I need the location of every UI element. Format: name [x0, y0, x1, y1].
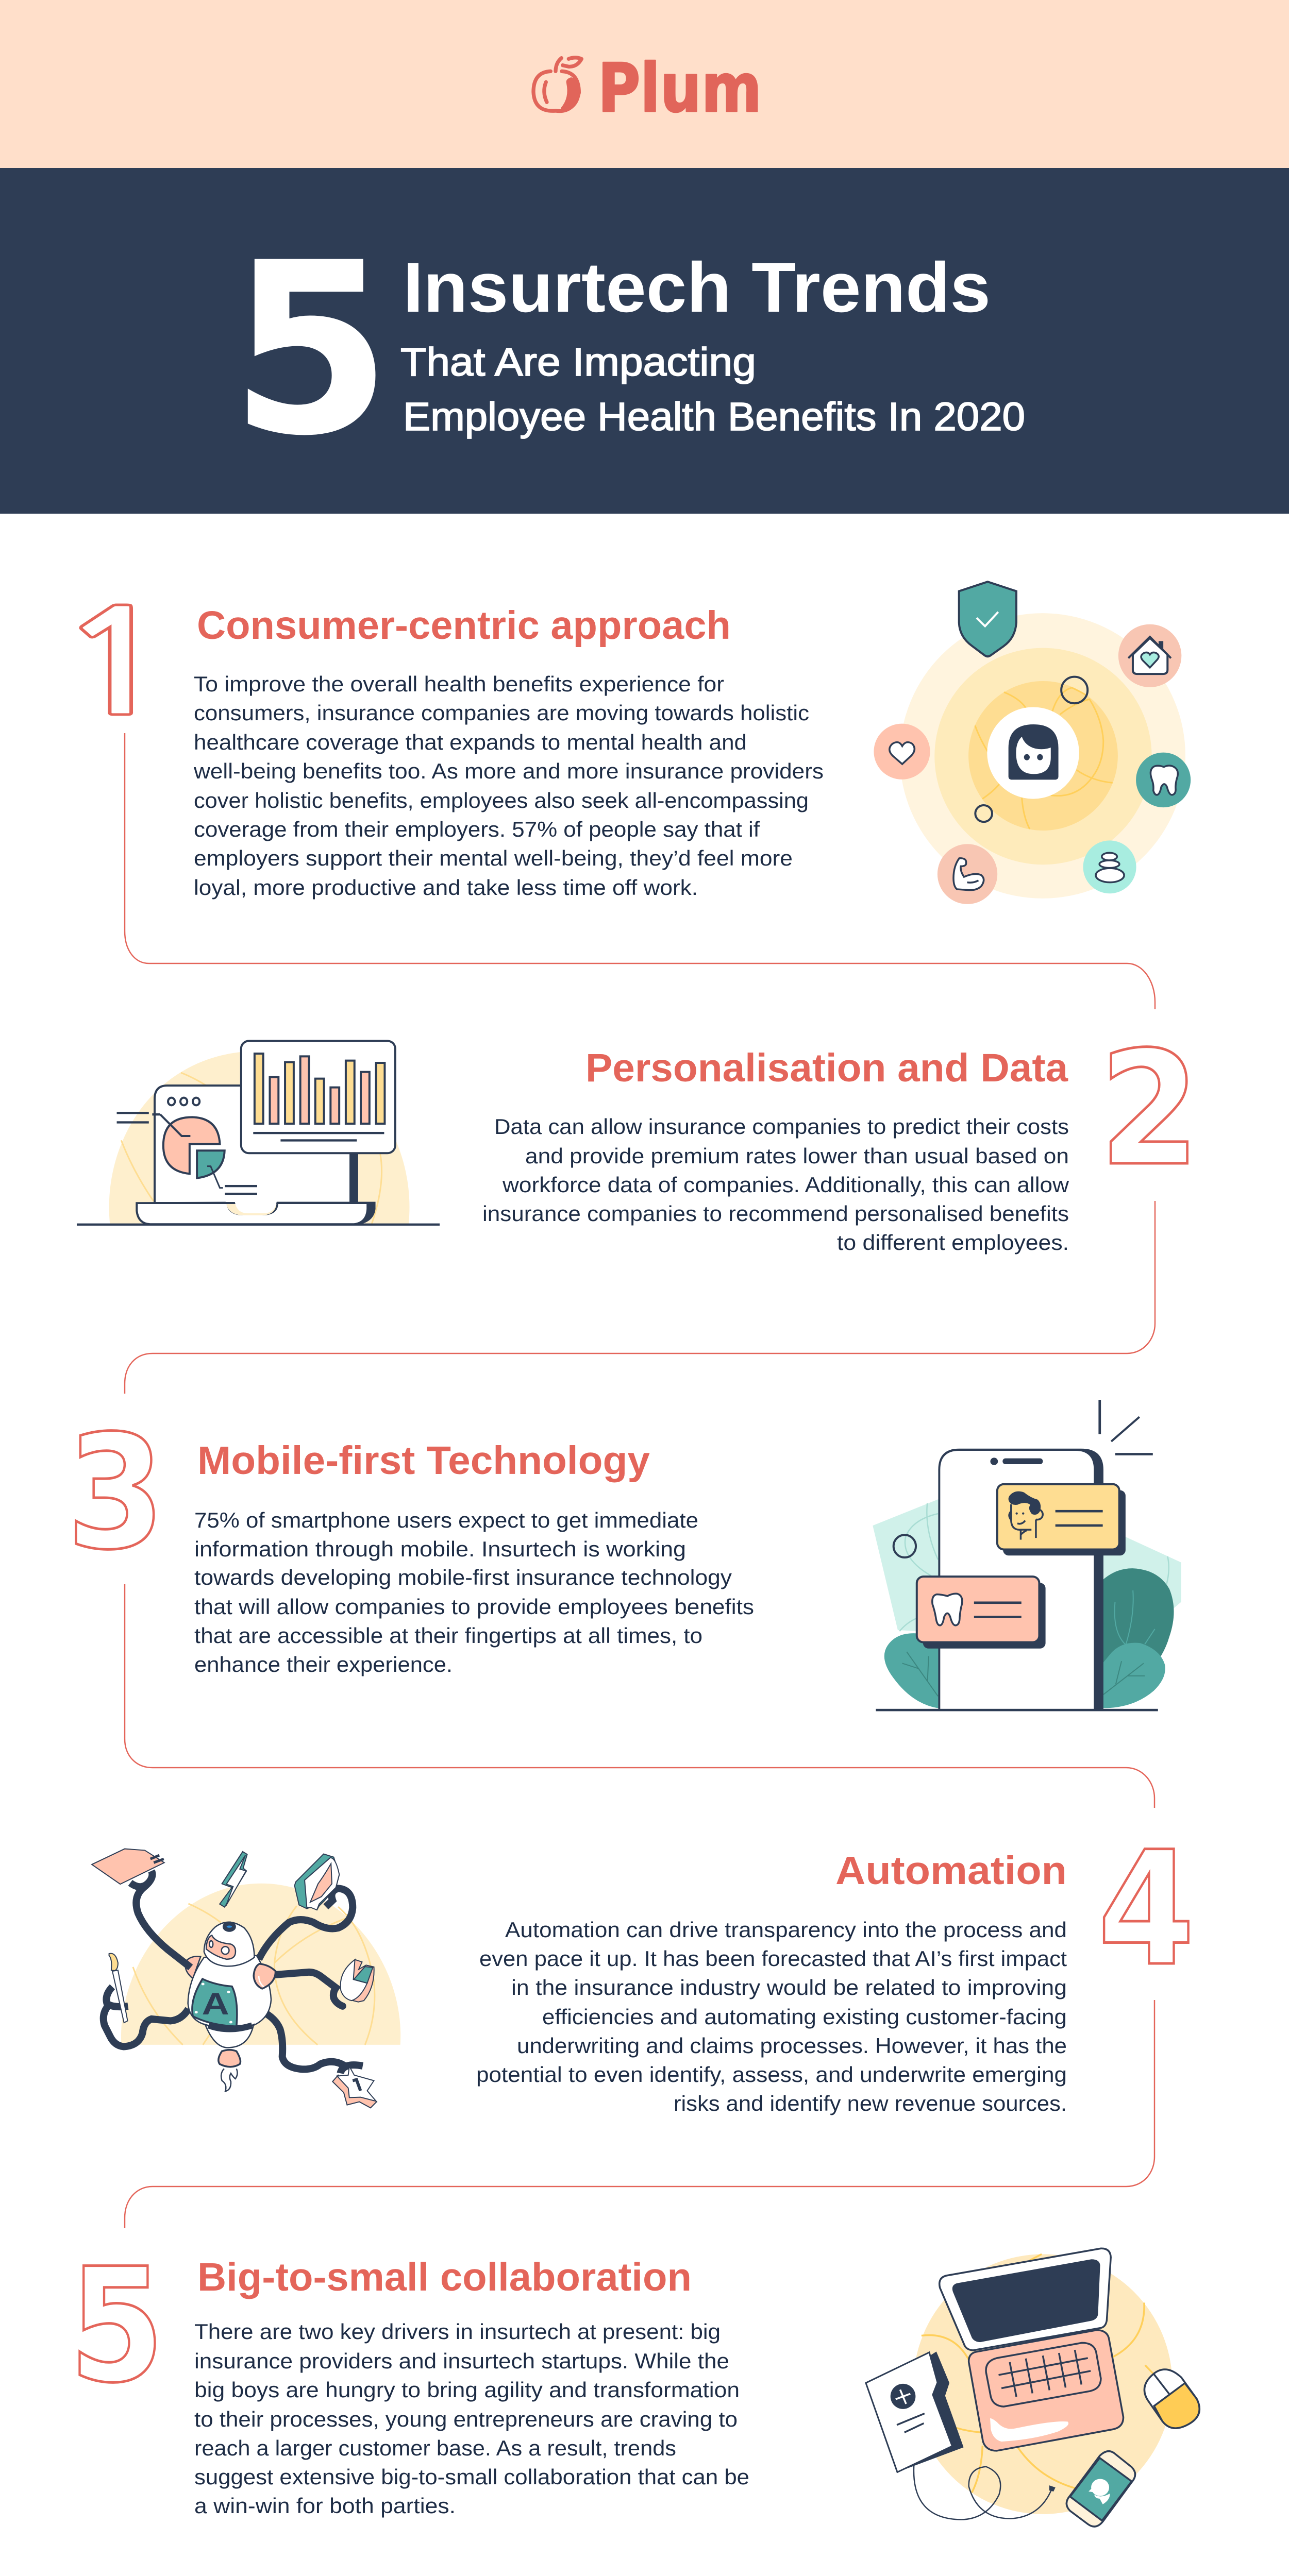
bar chart card	[241, 1041, 395, 1153]
connector line 2	[125, 1201, 1155, 1394]
body text 1: healthcare coverage that expands to mental health and	[194, 730, 747, 754]
panel: section 2 personalisation and data	[482, 1018, 1200, 1255]
connector line 1	[125, 733, 1155, 1009]
body text 5	[194, 2319, 749, 2518]
icon: chat bubble tile	[295, 1854, 339, 1910]
body text 1	[193, 672, 824, 900]
body text 2: and provide premium rates lower than usual based on	[525, 1144, 1069, 1168]
connector line 4	[125, 2000, 1154, 2228]
notification spark lines	[1098, 1400, 1153, 1455]
leaves	[884, 1568, 1174, 1708]
medical document	[866, 2351, 964, 2472]
outlined number 4: 4	[1098, 1818, 1195, 2001]
illustration: holistic benefits orbit	[874, 582, 1191, 904]
body text 5: There are two key drivers in insurtech at present: big	[194, 2319, 721, 2344]
icon: heart	[874, 724, 930, 779]
icon: pie chart tile	[341, 1960, 374, 2002]
body text 1: loyal, more productive and take less time off work.	[194, 875, 698, 900]
body text 5: a win-win for both parties.	[194, 2494, 456, 2518]
body text 2: to different employees.	[837, 1230, 1069, 1255]
icon: shield	[959, 582, 1016, 656]
panel: section 4 automation	[476, 1818, 1195, 2115]
heading 5: Big-to-small collaboration	[197, 2255, 692, 2299]
body text 2: Data can allow insurance companies to predict their costs	[494, 1114, 1069, 1139]
heading 1: Consumer-centric approach	[197, 603, 731, 648]
laptop screen	[155, 1086, 354, 1203]
icon: tooth	[1136, 753, 1191, 807]
body text 4: potential to even identify, assess, and underwrite emerging	[476, 2062, 1067, 2087]
outlined number 5: 5	[69, 2234, 164, 2417]
body text 4: efficiencies and automating existing customer-facing	[542, 2005, 1067, 2029]
laptop base	[136, 1202, 376, 1225]
logo: Plum apple icon	[533, 58, 581, 112]
outlined number 1: 1	[55, 593, 177, 736]
body text 2: workforce data of companies. Additionally, this can allow	[502, 1173, 1069, 1197]
body text 1: consumers, insurance companies are moving towards holistic	[194, 701, 809, 725]
big number 5: 5	[230, 212, 392, 488]
robot arms	[104, 1871, 363, 2073]
body text 3: that are accessible at their fingertips at all times, to	[194, 1623, 702, 1648]
body text 4	[476, 1918, 1067, 2115]
body text 1: cover holistic benefits, employees also seek all-encompassing	[194, 788, 809, 812]
phone body	[938, 1449, 1103, 1710]
body text 5: suggest extensive big-to-small collaboration that can be	[194, 2465, 749, 2489]
title banner	[0, 168, 1289, 514]
robot body	[186, 1922, 276, 2091]
mouse	[1144, 2369, 1199, 2428]
header band with logo	[0, 0, 1289, 168]
heading 4: Automation	[835, 1849, 1067, 1893]
body text 1: coverage from their employers. 57% of people say that if	[194, 817, 760, 841]
subtitle line 1: That Are Impacting	[400, 340, 756, 384]
card: dental message	[917, 1577, 1046, 1649]
heading 3: Mobile-first Technology	[197, 1438, 650, 1483]
body text 3: that will allow companies to provide employees benefits	[194, 1595, 754, 1619]
illustration: phone with benefit cards	[873, 1400, 1181, 1711]
body text 4: Automation can drive transparency into the process and	[505, 1918, 1067, 1942]
body text 3: 75% of smartphone users expect to get immediate	[194, 1508, 698, 1532]
robot chest letter A: A	[202, 1987, 229, 2021]
connector line 3	[125, 1584, 1154, 1808]
phone	[1066, 2451, 1135, 2527]
icon: star badge	[332, 2066, 377, 2108]
outlined number 3: 3	[66, 1401, 165, 1584]
body text 3: information through mobile. Insurtech is working	[194, 1537, 686, 1561]
panel: section 1 consumer-centric approach	[55, 593, 824, 900]
body text 5: big boys are hungry to bring agility and transformation	[194, 2378, 740, 2402]
laptop	[940, 2248, 1124, 2451]
body text 4: even pace it up. It has been forecasted that AI’s first impact	[479, 1946, 1067, 1971]
panel: section 3 mobile-first technology	[66, 1401, 754, 1676]
logo: Plum wordmark: Plum	[598, 49, 762, 127]
body text 5: insurance providers and insurtech startups. While the	[194, 2349, 729, 2373]
cable	[914, 2466, 1056, 2520]
illustration: multi-armed robot	[92, 1849, 400, 2108]
body text 4: risks and identify new revenue sources.	[674, 2091, 1067, 2115]
body text 1: well-being benefits too. As more and more insurance providers	[193, 759, 824, 783]
body text 4: in the insurance industry would be related to improving	[511, 1975, 1067, 1999]
icon: paint brush	[109, 1954, 128, 2023]
heading 2: Personalisation and Data	[585, 1046, 1068, 1090]
illustration: laptop, document, mouse and phone	[866, 2248, 1199, 2527]
icon: stacked stones	[1083, 840, 1136, 893]
body text 3: enhance their experience.	[194, 1652, 453, 1676]
title line: Insurtech Trends	[403, 248, 991, 327]
body text 3	[194, 1508, 754, 1676]
body text 4: underwriting and claims processes. However, it has the	[517, 2033, 1067, 2058]
body text 5: reach a larger customer base. As a result, trends	[194, 2436, 676, 2460]
subtitle line 2: Employee Health Benefits In 2020	[403, 395, 1025, 439]
body text 3: towards developing mobile-first insurance technology	[194, 1565, 732, 1589]
card: person message	[997, 1484, 1126, 1555]
panel: section 5 big-to-small collaboration	[69, 2234, 749, 2518]
illustration: laptop with data charts	[77, 1041, 440, 1226]
body text 1: employers support their mental well-being, they’d feel more	[194, 846, 793, 870]
icon: lightning bolt	[220, 1852, 247, 1907]
body text 5: to their processes, young entrepreneurs are craving to	[194, 2407, 738, 2431]
body text 2	[482, 1114, 1069, 1255]
body text 1: To improve the overall health benefits experience for	[194, 672, 724, 696]
pie chart	[117, 1112, 257, 1195]
icon: home with heart	[1118, 624, 1181, 687]
outlined number 2: 2	[1099, 1018, 1200, 1200]
icon: peach tile	[92, 1849, 164, 1884]
icon: person face	[1009, 724, 1059, 779]
icon: flexed arm	[938, 844, 997, 904]
body text 2: insurance companies to recommend personalised benefits	[482, 1201, 1069, 1226]
